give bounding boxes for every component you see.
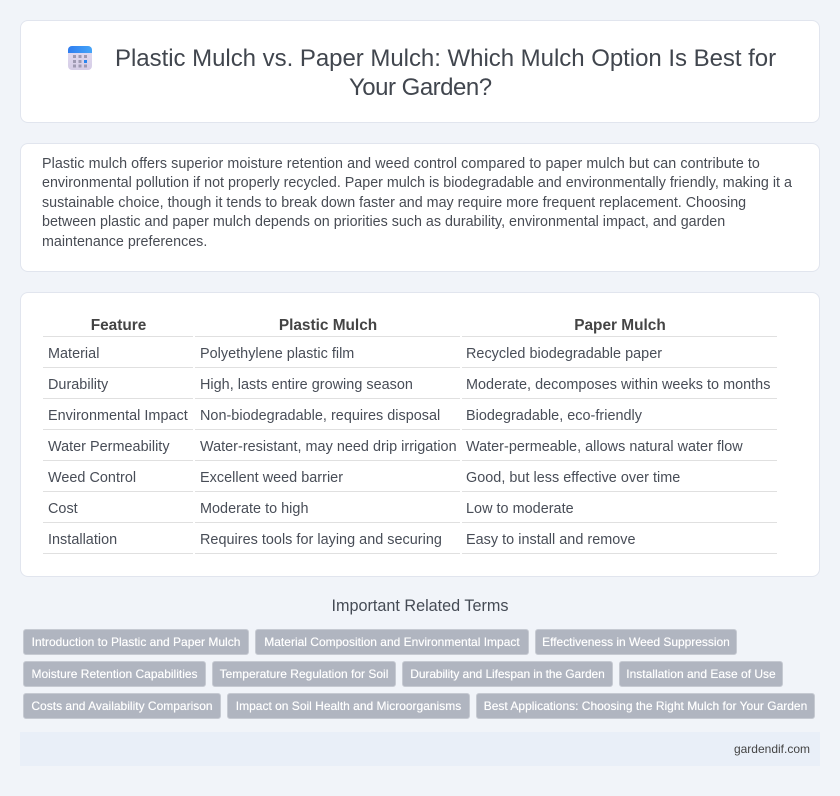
related terms tags: Introduction to Plastic and Paper Mulch (32, 635, 240, 649)
comparison table panel: Moderate to high (200, 501, 308, 517)
comparison table panel: Paper Mulch (574, 317, 666, 334)
related terms tags: Installation and Ease of Use (626, 667, 776, 681)
comparison table panel: Feature (91, 317, 146, 334)
related terms heading: Important Related Terms (332, 597, 508, 615)
related terms tags: Best Applications: Choosing the Right Mulch for Your Garden (484, 699, 807, 713)
comparison table panel: Moderate, decomposes within weeks to months (466, 377, 770, 393)
comparison table panel: Biodegradable, eco-friendly (466, 408, 642, 424)
comparison table panel: Weed Control (48, 470, 136, 486)
comparison table panel: Environmental Impact (48, 408, 188, 424)
comparison table panel: Polyethylene plastic film (200, 346, 354, 362)
header card (20, 20, 820, 123)
icon: calendar (68, 46, 92, 70)
title: Your Garden? (349, 74, 492, 101)
footer source: gardendif.com (734, 742, 810, 756)
intro text panel: between plastic and paper mulch depends on priorities such as durability, environmental impact, and garden (42, 214, 725, 230)
comparison table panel: Plastic Mulch (279, 317, 377, 334)
related terms tags: Material Composition and Environmental Impact (264, 635, 520, 649)
comparison table panel: High, lasts entire growing season (200, 377, 413, 393)
related terms tags: Impact on Soil Health and Microorganisms (236, 699, 461, 713)
title: Plastic Mulch vs. Paper Mulch: Which Mulch Option Is Best for (115, 45, 776, 72)
comparison table panel: Excellent weed barrier (200, 470, 343, 486)
comparison table panel: Cost (48, 501, 78, 517)
footer (20, 732, 820, 766)
related terms tags (23, 629, 815, 719)
intro text panel: maintenance preferences. (42, 234, 207, 250)
comparison table panel: Non-biodegradable, requires disposal (200, 408, 440, 424)
related terms tags: Temperature Regulation for Soil (220, 667, 388, 681)
comparison table panel: Low to moderate (466, 501, 574, 517)
title (115, 45, 776, 101)
comparison table panel: Requires tools for laying and securing (200, 532, 442, 548)
related terms tags: Durability and Lifespan in the Garden (410, 667, 605, 681)
comparison table panel: Good, but less effective over time (466, 470, 680, 486)
intro text panel: sustainable choice, though it tends to break down faster and may require more frequent replacement. Choosing (42, 195, 746, 211)
comparison table panel: Recycled biodegradable paper (466, 346, 662, 362)
comparison table panel (20, 292, 820, 577)
related terms tags: Moisture Retention Capabilities (31, 667, 198, 681)
comparison table panel: Water Permeability (48, 439, 170, 455)
related terms tags: Costs and Availability Comparison (31, 699, 213, 713)
comparison table panel: Installation (48, 532, 117, 548)
comparison table panel: Water-resistant, may need drip irrigation (200, 439, 457, 455)
comparison table panel: Water-permeable, allows natural water flow (466, 439, 743, 455)
related terms tags: Effectiveness in Weed Suppression (542, 635, 730, 649)
intro text panel: environmental pollution if not properly recycled. Paper mulch is biodegradable and environmentally friendly, making it a (42, 175, 792, 191)
intro text panel (20, 143, 820, 272)
intro text panel: Plastic mulch offers superior moisture retention and weed control compared to paper mulch but can contribute to (42, 156, 760, 172)
comparison table panel: Material (48, 346, 99, 362)
comparison table panel: Easy to install and remove (466, 532, 636, 548)
comparison table panel: Durability (48, 377, 108, 393)
